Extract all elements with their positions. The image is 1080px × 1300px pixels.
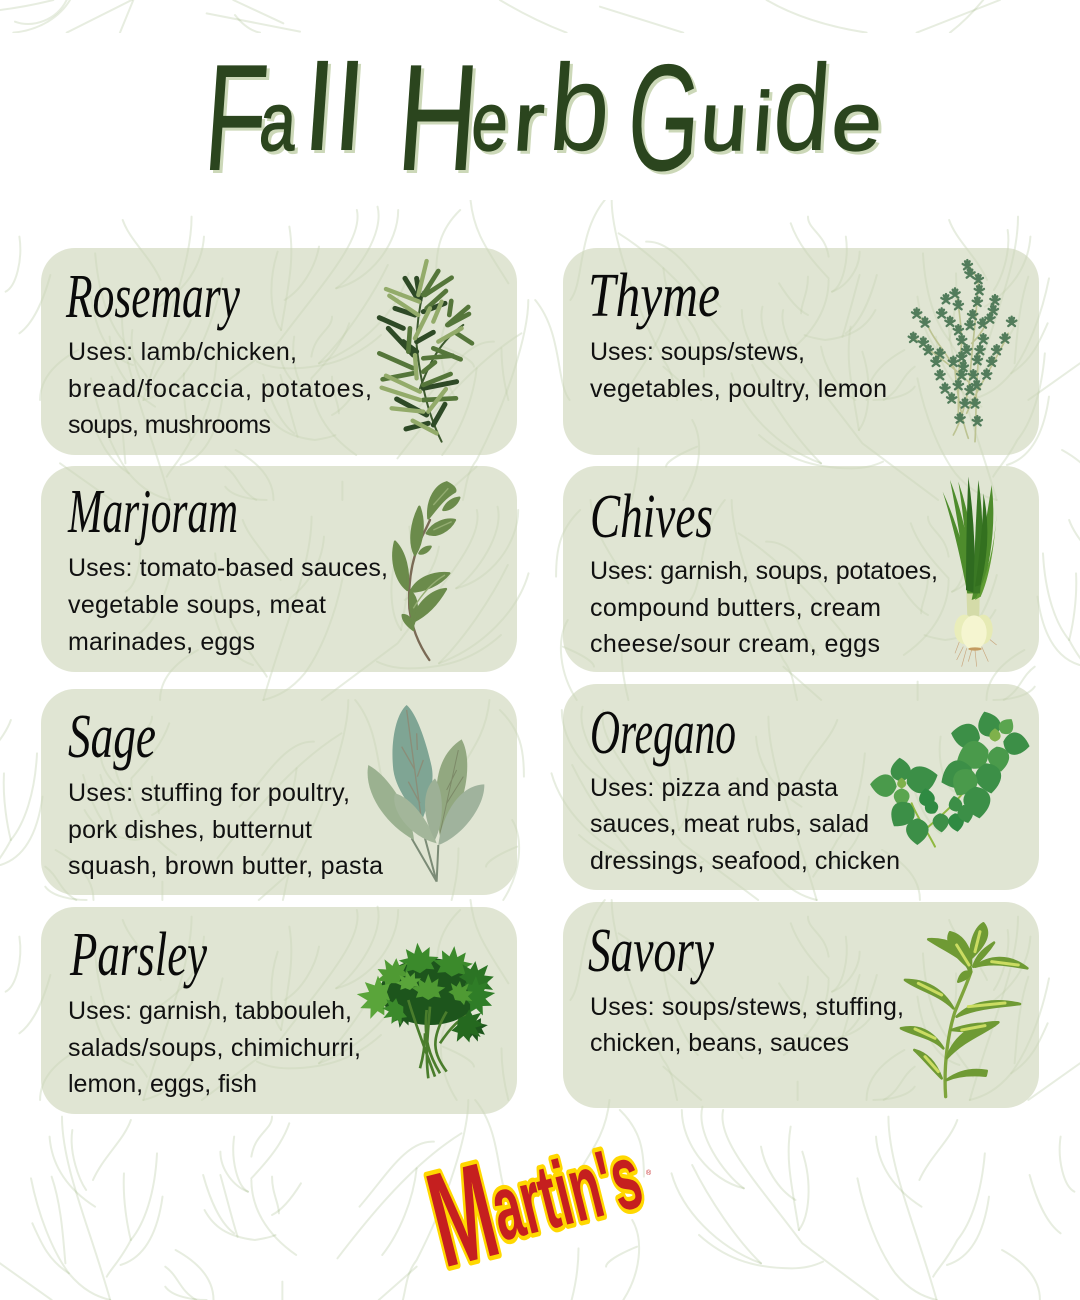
- icon: parsley bunch: [353, 941, 503, 1078]
- uses: Parsley: Uses: garnish, tabbouleh,: [68, 997, 352, 1025]
- uses: Parsley: lemon, eggs, fish: [68, 1070, 257, 1098]
- icon: thyme sprig: [909, 260, 1016, 442]
- herb name: Marjoram: Marjoram: [67, 478, 238, 546]
- title: d: [769, 40, 835, 177]
- logo: Martin's: ®: [646, 1169, 652, 1177]
- uses: Oregano: [590, 774, 900, 875]
- uses: Chives: [590, 557, 938, 658]
- logo: Martin's: [415, 1099, 656, 1296]
- title: [199, 33, 888, 203]
- title: H: [392, 33, 484, 203]
- icon: savory sprig: [901, 923, 1027, 1097]
- uses: Marjoram: [68, 554, 388, 656]
- logo: Martin's: artin's: [481, 1124, 651, 1260]
- uses: Oregano: Uses: pizza and pasta: [590, 774, 838, 802]
- panel: Thyme: [563, 248, 1039, 455]
- title: r: [511, 75, 547, 168]
- uses: Marjoram: Uses: tomato-based sauces,: [68, 554, 388, 582]
- title: b: [545, 40, 615, 177]
- herb name: Oregano: Oregano: [590, 699, 736, 767]
- herb name: Chives: Chives: [590, 483, 713, 551]
- logo: Martin's: M: [415, 1135, 511, 1296]
- uses: Sage: Uses: stuffing for poultry,: [68, 779, 350, 807]
- uses: Marjoram: marinades, eggs: [68, 628, 255, 656]
- panel: Parsley: [41, 907, 517, 1114]
- panel: Marjoram: [41, 466, 517, 672]
- uses: Oregano: dressings, seafood, chicken: [590, 847, 900, 875]
- icon: sage leaves: [368, 705, 484, 882]
- uses: Sage: pork dishes, butternut: [68, 816, 312, 844]
- panel: Sage: [41, 689, 517, 895]
- title: e: [469, 75, 511, 168]
- herb name: Savory: Savory: [588, 917, 714, 985]
- uses: Chives: Uses: garnish, soups, potatoes,: [590, 557, 938, 585]
- icon: rosemary sprig: [379, 261, 472, 442]
- title: i: [751, 75, 775, 168]
- herb name: Thyme: Thyme: [588, 262, 720, 330]
- title: l: [331, 40, 368, 177]
- uses: Marjoram: vegetable soups, meat: [68, 591, 326, 619]
- herb name: Sage: Sage: [68, 703, 156, 771]
- uses: Sage: [68, 779, 383, 880]
- uses: Thyme: [590, 338, 887, 403]
- panel: Savory: [563, 902, 1039, 1108]
- icon: chive plant with bulb: [943, 477, 997, 667]
- uses: Thyme: vegetables, poultry, lemon: [590, 375, 887, 403]
- uses: Chives: cheese/sour cream, eggs: [590, 630, 880, 658]
- uses: Rosemary: soups, mushrooms: [68, 411, 271, 439]
- uses: Oregano: sauces, meat rubs, salad: [590, 810, 869, 838]
- uses: Rosemary: Uses: lamb/chicken,: [68, 338, 297, 366]
- uses: Chives: compound butters, cream: [590, 594, 881, 622]
- title: a: [257, 75, 300, 168]
- uses: Sage: squash, brown butter, pasta: [68, 852, 383, 880]
- uses: Thyme: Uses: soups/stews,: [590, 338, 805, 366]
- icon: marjoram sprig: [393, 482, 459, 660]
- uses: Parsley: salads/soups, chimichurri,: [68, 1034, 361, 1062]
- uses: Savory: [590, 993, 904, 1057]
- title: l: [301, 40, 338, 177]
- title: u: [698, 75, 750, 168]
- panel: Rosemary: [41, 248, 517, 455]
- icon: oregano sprig: [869, 708, 1032, 847]
- panel: Oregano: [563, 684, 1039, 890]
- uses: Rosemary: [68, 338, 372, 439]
- uses: Rosemary: bread/focaccia, potatoes,: [68, 375, 372, 403]
- uses: Parsley: [68, 997, 361, 1098]
- herb name: Rosemary: Rosemary: [65, 263, 240, 331]
- uses: Savory: chicken, beans, sauces: [590, 1029, 849, 1057]
- title: F: [199, 33, 273, 203]
- title: G: [622, 33, 706, 203]
- panel: Chives: [563, 466, 1039, 672]
- title: e: [829, 75, 885, 168]
- herb name: Parsley: Parsley: [69, 921, 207, 989]
- uses: Savory: Uses: soups/stews, stuffing,: [590, 993, 904, 1021]
